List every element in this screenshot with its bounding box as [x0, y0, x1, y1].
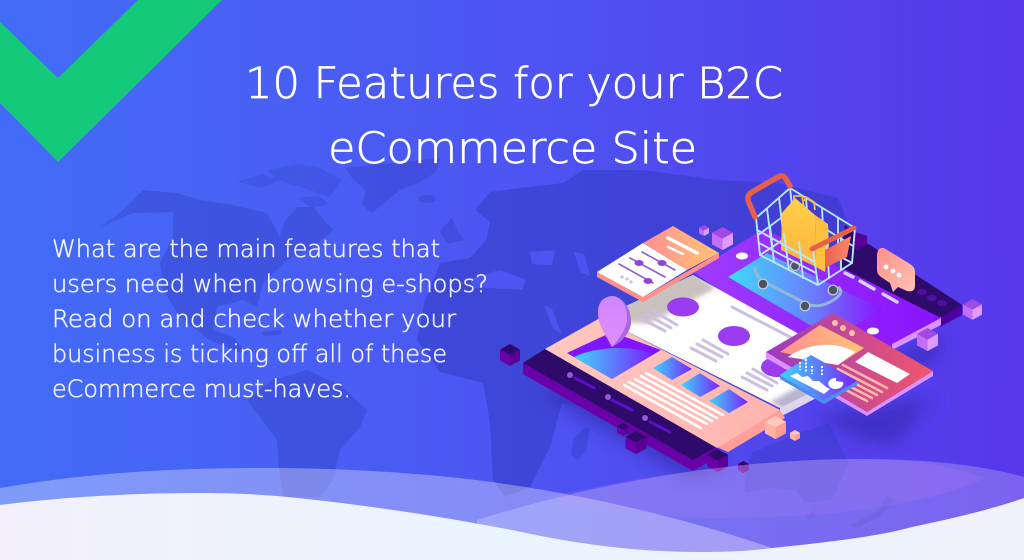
red front panel: [825, 236, 851, 268]
wave: translucent left: [0, 468, 772, 560]
map: British Isles: [440, 217, 464, 244]
page circles: [667, 298, 699, 316]
thumbnails: [653, 357, 692, 380]
wheels: [758, 262, 838, 311]
map: Caribbean: [262, 330, 282, 336]
intro text: users need when browsing e-shops?: [52, 270, 488, 298]
front basket wires: [756, 218, 855, 285]
intro text: eCommerce must-haves.: [52, 375, 351, 403]
wave: faint pink band: [417, 459, 985, 518]
white text lines: [646, 373, 723, 415]
title: eCommerce Site: [328, 124, 697, 174]
map: Arctic islands: [237, 164, 342, 208]
pie chart: [828, 378, 843, 389]
white page panel: [626, 275, 818, 416]
intro text: What are the main features that: [52, 235, 440, 263]
shopping bag: [781, 196, 829, 272]
map: Madagascar: [571, 427, 590, 460]
shopping cart: [748, 176, 855, 311]
map: North America: [100, 190, 333, 353]
chart bars: [800, 359, 822, 376]
wave: pale base: [0, 493, 1024, 560]
intro text: [52, 235, 488, 403]
map: Greenland: [345, 158, 440, 213]
browser window card: [766, 313, 933, 416]
handles: [748, 176, 854, 249]
rear purple platform: [693, 229, 941, 365]
cart chassis: [755, 267, 841, 306]
title: 10 Features for your B2C: [245, 59, 783, 109]
isometric shop illustration: [500, 176, 982, 480]
map: Australia: [745, 423, 849, 503]
bottom waves: [0, 459, 1024, 560]
small dashboard card: [780, 355, 857, 404]
world map silhouette: [100, 158, 895, 528]
map: Iceland: [418, 195, 436, 203]
map pin: [598, 296, 631, 347]
hero image: [567, 332, 661, 379]
map: Eurasia and Africa: [417, 170, 850, 497]
wave: translucent right: [477, 459, 1024, 560]
rear dark strip: [840, 225, 962, 327]
slider settings card: [597, 226, 719, 302]
shadows under platforms: [540, 335, 945, 480]
front dark strip: [523, 349, 717, 471]
map: South America: [247, 370, 367, 497]
chat bubble: [877, 248, 915, 292]
map: New Zealand and Tasmania: [807, 495, 895, 528]
intro text: Read on and check whether your: [52, 305, 456, 333]
intro text: business is ticking off all of these: [52, 340, 447, 368]
page text lines: [652, 310, 677, 325]
rear basket wires: [756, 188, 855, 263]
check mark: [0, 0, 222, 162]
title: [245, 59, 783, 174]
floating cubes: [500, 225, 982, 473]
pink front panel: [545, 318, 785, 452]
